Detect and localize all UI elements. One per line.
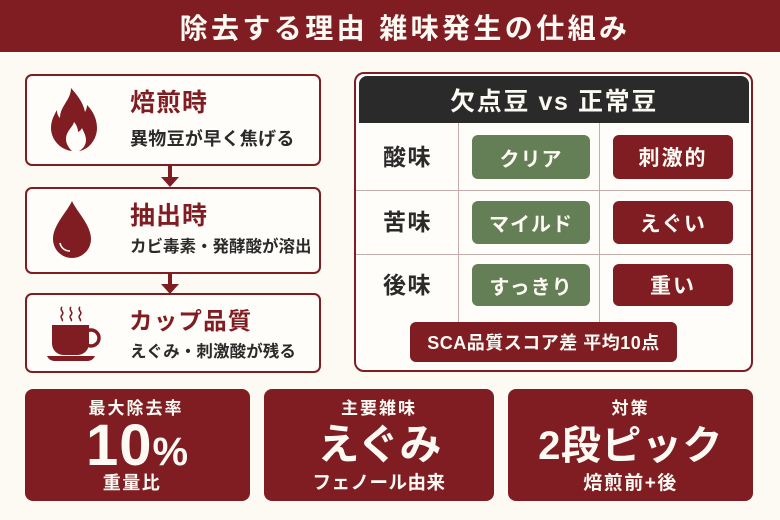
title banner <box>0 0 780 52</box>
defect bean: acrid: えぐい <box>640 212 706 236</box>
score callout <box>410 322 677 362</box>
panel: comparison table <box>354 72 753 372</box>
step heading: 焙煎時 <box>130 89 208 117</box>
defect bean: acrid <box>613 201 733 244</box>
defect bean: heavy <box>613 264 733 306</box>
arrow: extraction to cup <box>161 274 179 293</box>
stat label: 対策 <box>612 399 650 418</box>
stat note: 重量比 <box>103 473 161 493</box>
row label: aftertaste: 後味 <box>383 272 432 298</box>
table heading: 欠点豆 vs 正常豆 <box>450 88 658 116</box>
row label: acidity: 酸味 <box>383 144 432 170</box>
stat value: 10% <box>86 413 189 478</box>
defect bean: harsh: 刺激的 <box>638 147 708 170</box>
step description: 異物豆が早く焦げる <box>130 129 295 149</box>
table header <box>359 76 749 123</box>
stat value: えぐみ <box>317 421 440 468</box>
icon: coffee cup <box>47 306 101 361</box>
stat card: main off-flavor <box>264 389 494 501</box>
stat label: 主要雑味 <box>341 399 417 418</box>
score callout: SCA品質スコア差 平均10点 <box>427 333 660 353</box>
row label: bitterness: 苦味 <box>383 209 432 235</box>
normal bean: clear: クリア <box>500 148 562 170</box>
step description: えぐみ・刺激酸が残る <box>130 343 296 361</box>
stat note: 焙煎前+後 <box>583 473 678 494</box>
defect bean: heavy: 重い <box>650 275 696 298</box>
defect bean: harsh <box>613 135 733 179</box>
arrow: roasting to extraction <box>161 166 179 187</box>
normal bean: mild: マイルド <box>489 214 573 236</box>
title: 除去する理由 雑味発生の仕組み <box>180 13 630 44</box>
icon: water drop <box>53 201 91 258</box>
step description: カビ毒素・発酵酸が溶出 <box>130 238 312 256</box>
stat note: フェノール由来 <box>312 472 446 493</box>
step heading: 抽出時 <box>130 202 208 230</box>
step heading: カップ品質 <box>129 308 252 334</box>
panel: cup quality step <box>25 293 321 373</box>
stat card: max removal <box>25 389 250 501</box>
panel: roasting step <box>25 74 321 166</box>
panel: extraction step <box>25 187 321 274</box>
stat label: 最大除去率 <box>88 399 184 418</box>
icon: flame <box>51 88 97 151</box>
normal bean: mild <box>472 201 590 244</box>
normal bean: clean: すっきり <box>489 276 573 298</box>
normal bean: clean <box>472 264 590 306</box>
stat value: 2段ピック <box>538 424 723 468</box>
stat card: countermeasure <box>508 389 753 501</box>
normal bean: clear <box>472 135 590 179</box>
